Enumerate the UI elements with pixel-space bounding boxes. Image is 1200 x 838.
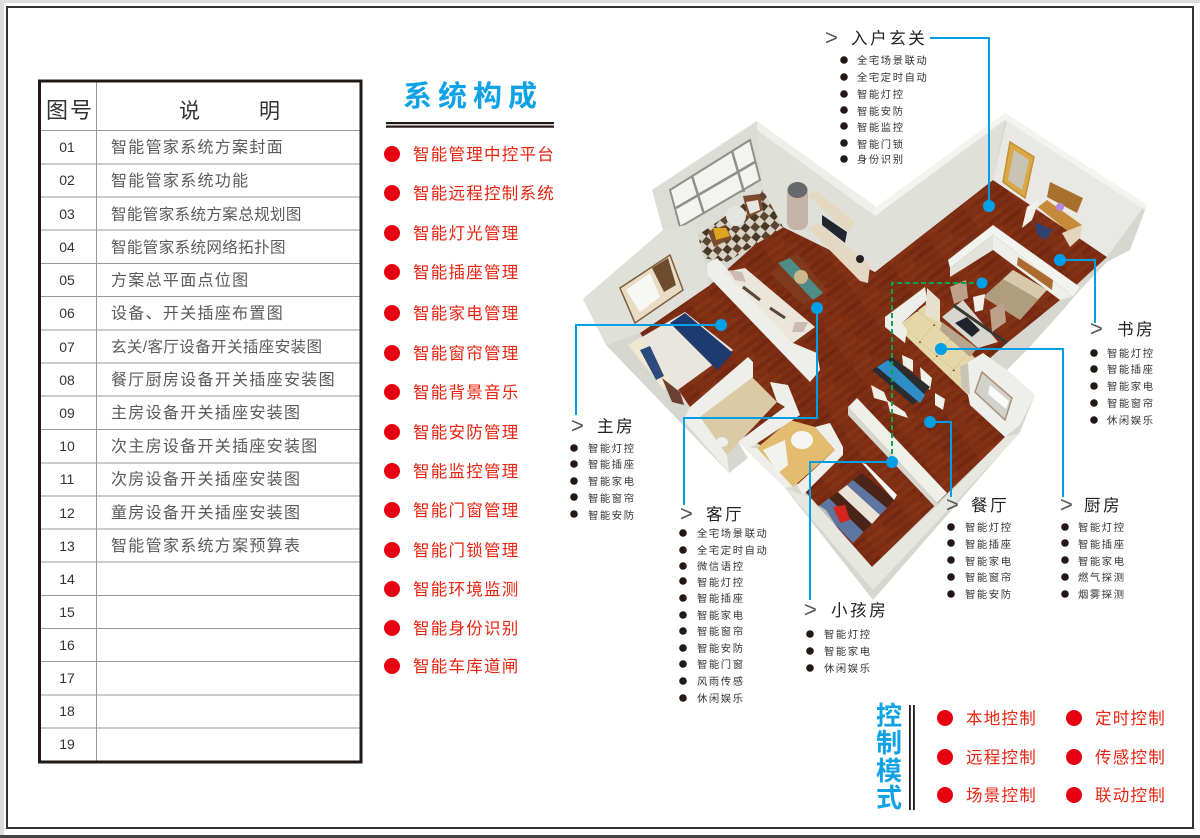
room: dining room: 智能家电: [965, 555, 1013, 568]
child room: [818, 393, 947, 543]
room: master bedroom: 智能灯控: [588, 442, 636, 455]
room: living room: 风雨传感: [697, 675, 745, 688]
room: dining room: 智能窗帘: [965, 571, 1013, 584]
room: kitchen: 智能家电: [1078, 555, 1126, 568]
room: dining room: [946, 492, 1013, 601]
room: entrance: 智能门锁: [857, 138, 905, 151]
room: dining room: 智能灯控: [965, 521, 1013, 534]
control modes list: 定时控制: [1095, 709, 1166, 728]
control modes heading: 模: [876, 756, 902, 786]
table header: [46, 98, 280, 123]
room: master bedroom: 智能家电: [588, 475, 636, 488]
control modes heading: 制: [876, 728, 902, 758]
system list: 智能管理中控平台: [413, 145, 555, 164]
room: study: 智能灯控: [1107, 347, 1155, 360]
room: living room: 智能灯控: [697, 576, 745, 589]
kitchen window wall: [960, 353, 1035, 437]
system list: 智能监控管理: [413, 462, 520, 481]
room: entrance: 智能灯控: [857, 88, 905, 101]
sofa and wall: [707, 258, 820, 382]
room: kitchen: 烟雾探测: [1078, 588, 1126, 601]
system list: 智能环境监测: [413, 580, 520, 599]
table rows: 智能管家系统方案预算表: [111, 536, 301, 555]
table rows: 设备、开关插座布置图: [111, 304, 284, 322]
table rows: 17: [59, 670, 75, 686]
room: entrance: 智能监控: [857, 121, 905, 134]
system list: 智能背景音乐: [413, 383, 520, 402]
control modes: [876, 701, 1166, 813]
control modes heading: 控: [876, 701, 902, 731]
room: living room: 客厅: [706, 505, 744, 524]
lower walls: [785, 433, 1020, 590]
table rows: 智能管家系统方案总规划图: [111, 206, 302, 224]
table rows: 方案总平面点位图: [111, 272, 249, 290]
room: study: 智能家电: [1107, 380, 1155, 393]
room: dining room: 智能插座: [965, 538, 1013, 551]
table rows: 10: [59, 438, 75, 454]
room: kitchen: 厨房: [1084, 496, 1122, 515]
table rows: 智能管家系统方案封面: [111, 138, 284, 156]
table rows: 童房设备开关插座安装图: [111, 503, 301, 522]
room: study: >: [1090, 316, 1103, 341]
wood floors: [640, 180, 1107, 567]
master bed: [628, 312, 733, 405]
room: entrance: 全宅场景联动: [857, 54, 928, 67]
table rows: 13: [59, 538, 75, 554]
room: living room: 微信语控: [697, 560, 745, 573]
table header: 明: [259, 100, 280, 123]
system list: 智能安防管理: [413, 423, 520, 442]
room: living room: 智能家电: [697, 609, 745, 622]
drawing index table: [40, 81, 361, 762]
table rows: 11: [60, 471, 74, 487]
TV cabinet: [808, 190, 870, 283]
table rows: 15: [59, 604, 75, 620]
callout lines: [576, 38, 1095, 600]
room: study: [1090, 316, 1155, 427]
secondary bedroom: [948, 225, 1080, 320]
system list: 智能插座管理: [413, 263, 520, 282]
room: master bedroom: [570, 413, 636, 522]
table rows: 08: [59, 372, 75, 388]
room: living room: 智能安防: [697, 642, 745, 655]
table rows: 02: [59, 172, 75, 188]
control modes list: 传感控制: [1095, 748, 1166, 767]
table rows: 05: [59, 272, 75, 288]
room: kitchen: 燃气探测: [1078, 571, 1126, 584]
room: children's room: 小孩房: [831, 601, 888, 620]
desk: [1047, 182, 1083, 213]
table rows: 智能管家系统网络拓扑图: [111, 238, 286, 256]
table rows: 主房设备开关插座安装图: [111, 404, 301, 422]
room: dining room: >: [946, 492, 959, 517]
3D floor plan: [583, 113, 1147, 600]
system list: 智能窗帘管理: [413, 344, 520, 363]
room: children's room: [804, 597, 888, 675]
table rows: 14: [59, 571, 75, 587]
system list: 智能车库道闸: [413, 657, 520, 676]
room: entrance: [825, 25, 928, 166]
room: study: 书房: [1117, 320, 1155, 339]
table rows: 01: [59, 139, 75, 155]
room: entrance: 入户玄关: [851, 29, 927, 48]
living back wall: [757, 128, 875, 272]
system list: 智能灯光管理: [413, 224, 520, 243]
room: children's room: >: [804, 597, 817, 622]
control modes heading: 式: [876, 783, 902, 813]
room: living room: 休闲娱乐: [697, 692, 745, 705]
table rows: 次房设备开关插座安装图: [111, 470, 301, 488]
air conditioner: [787, 182, 808, 230]
heading: system composition: 系统构成: [403, 80, 543, 113]
table rows: 06: [59, 305, 75, 321]
kitchen: [885, 280, 1007, 395]
table header: 图号: [46, 98, 94, 123]
table rows: 玄关/客厅设备开关插座安装图: [111, 338, 322, 356]
room: children's room: 休闲娱乐: [824, 662, 872, 675]
table rows: 19: [59, 736, 75, 752]
room: living room: 全宅定时自动: [697, 544, 768, 557]
room: dining room: 餐厅: [971, 496, 1009, 515]
room: living room: 全宅场景联动: [697, 527, 768, 540]
child bed stripes: [818, 498, 864, 543]
table rows: 07: [59, 339, 75, 355]
system list: 智能远程控制系统: [413, 184, 555, 203]
system list: 智能门锁管理: [413, 541, 520, 560]
room: living room: 智能窗帘: [697, 625, 745, 638]
coffee table: [770, 253, 827, 305]
room: living room: 智能门窗: [697, 658, 745, 671]
room: living room: >: [680, 501, 693, 526]
room: master bedroom: 主房: [597, 417, 635, 436]
control modes heading: [876, 701, 915, 813]
room: master bedroom: 智能安防: [588, 509, 636, 522]
room: children's room: 智能家电: [824, 645, 872, 658]
room: kitchen: >: [1060, 492, 1073, 517]
entry wall faces: [875, 113, 1147, 272]
system list: 智能门窗管理: [413, 501, 520, 520]
room: entrance: >: [825, 25, 838, 50]
room: study: 智能插座: [1107, 363, 1155, 376]
balcony tile floor: [698, 190, 787, 262]
balcony window wall: [652, 121, 763, 247]
control modes list: 远程控制: [966, 748, 1037, 767]
table rows: 04: [59, 239, 75, 255]
table rows: 次主房设备开关插座安装图: [111, 438, 319, 456]
table rows: 16: [59, 637, 75, 653]
room: entrance: 全宅定时自动: [857, 71, 928, 84]
table rows: 餐厅厨房设备开关插座安装图: [111, 371, 336, 389]
master bedroom wall: [583, 223, 710, 345]
table rows: 09: [59, 405, 75, 421]
plan silhouette: [583, 113, 1147, 600]
bathrooms: [683, 357, 843, 495]
room: entrance: 智能安防: [857, 105, 905, 118]
green dashed wiring: [892, 283, 982, 462]
table rows: 03: [59, 206, 75, 222]
room: master bedroom: 智能窗帘: [588, 492, 636, 505]
room: study: 智能窗帘: [1107, 397, 1155, 410]
system list: 智能身份识别: [413, 619, 520, 638]
room: living room: [679, 501, 768, 705]
door: [1003, 142, 1034, 198]
system list: 智能家电管理: [413, 304, 520, 323]
room: kitchen: 智能灯控: [1078, 521, 1126, 534]
room: kitchen: [1060, 492, 1126, 601]
room: dining room: 智能安防: [965, 588, 1013, 601]
table rows: 智能管家系统功能: [111, 172, 249, 190]
room: children's room: 智能灯控: [824, 628, 872, 641]
room: master bedroom: 智能插座: [588, 458, 636, 471]
room: entrance: 身份识别: [857, 153, 905, 166]
room: living room: 智能插座: [697, 592, 745, 605]
system list: [384, 145, 555, 676]
control modes list: 本地控制: [966, 709, 1037, 728]
table rows: 18: [59, 703, 75, 719]
room: study: 休闲娱乐: [1107, 414, 1155, 427]
room: kitchen: 智能插座: [1078, 538, 1126, 551]
room: master bedroom: >: [571, 413, 584, 438]
table rows: 12: [59, 505, 75, 521]
control modes list: 联动控制: [1095, 786, 1166, 805]
table rows: [59, 138, 336, 752]
control modes list: 场景控制: [966, 786, 1037, 805]
control modes list: [937, 709, 1166, 805]
table header: 说: [179, 100, 200, 123]
dining table: [871, 355, 932, 418]
